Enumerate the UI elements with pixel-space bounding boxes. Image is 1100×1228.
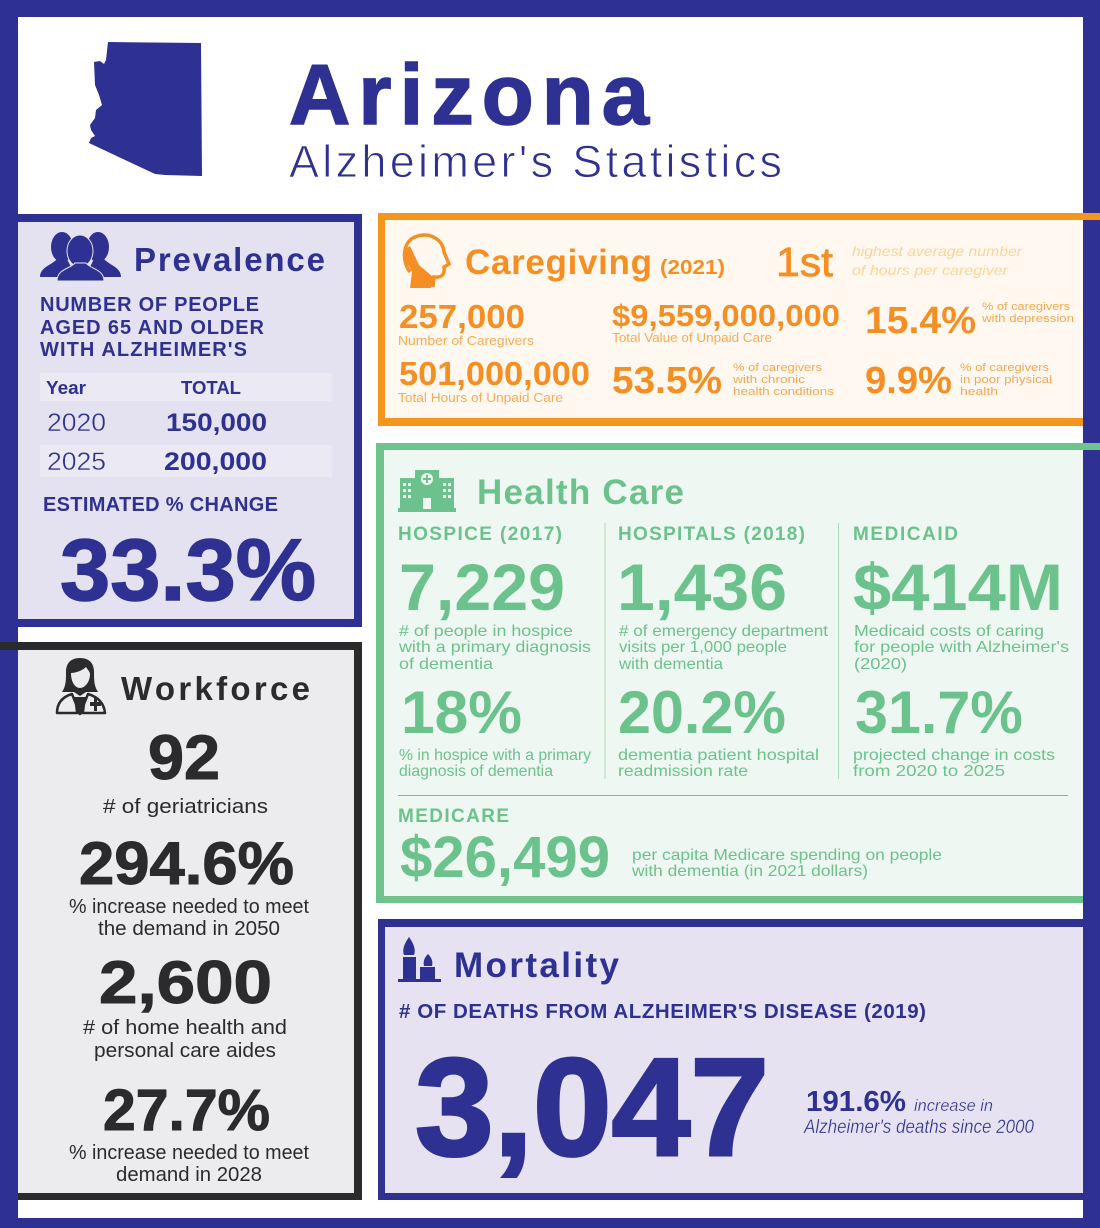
stat: 294.6%: 294.6% (79, 830, 294, 897)
heading: health care: Health Care (477, 473, 684, 512)
block: medicare: with dementia (in 2021 dollars) (631, 863, 868, 880)
column: medicaid: from 2020 to 2025 (853, 763, 1005, 780)
icon: candles (398, 937, 441, 982)
stat: 2,600 aides: personal care aides (94, 1040, 276, 1062)
panel: health care (376, 443, 1100, 903)
stat: 294.6%: the demand in 2050 (98, 918, 280, 940)
column: hospice: 7,229 (399, 550, 565, 624)
stat: depression (865, 300, 1074, 342)
panel: mortality (378, 919, 1083, 1200)
stat: 27.7%: % increase needed to meet (69, 1142, 309, 1164)
stat: 294.6% (69, 830, 309, 940)
column: hospice: HOSPICE (2017) (398, 524, 562, 545)
stat: 1st: 1st (776, 239, 834, 285)
subheading: deaths: # OF DEATHS FROM ALZHEIMER'S DISEASE (2019) (399, 1000, 926, 1023)
stat: 191.6% increase: 191.6% (806, 1086, 906, 1118)
stat: 33.3%: 33.3% (60, 522, 316, 619)
table: prevalence by year: TOTAL (181, 378, 241, 398)
caption: highest average hours (852, 243, 1023, 278)
block: medicare (398, 806, 942, 890)
column: hospice: % in hospice with a primary (399, 747, 591, 764)
stat: 191.6% increase: Alzheimer's deaths since 2000 (803, 1117, 1034, 1138)
icon: Arizona state map (89, 42, 202, 176)
column: hospitals: HOSPITALS (2018) (618, 524, 805, 545)
subheading: number of people: AGED 65 AND OLDER (40, 317, 265, 339)
stat: value of unpaid care: Total Value of Unpaid Care (612, 331, 772, 345)
stat: 2,600 aides: # of home health and (83, 1017, 287, 1039)
stat: hours of unpaid care: 501,000,000 (399, 355, 590, 392)
column: medicaid (853, 524, 1069, 780)
heading: workforce: Workforce (121, 670, 310, 707)
caption: highest average hours: highest average number (852, 243, 1023, 259)
icon: group of people (40, 232, 121, 281)
column: medicaid: (2020) (854, 656, 907, 673)
caption: highest average hours: of hours per caregiver (852, 262, 1010, 278)
stat: chronic conditions (612, 360, 835, 402)
stat: 2,600 aides (83, 949, 287, 1062)
table: prevalence by year: Year (46, 378, 86, 398)
column: medicaid: $414M (853, 550, 1063, 624)
column: hospitals: 20.2% (618, 679, 786, 746)
column: hospitals: visits per 1,000 people (619, 639, 787, 656)
column: medicaid: MEDICAID (853, 524, 958, 545)
stat: 27.7%: demand in 2028 (116, 1164, 262, 1186)
table: prevalence by year: 200,000 (164, 448, 267, 476)
stat: 92 geriatricians (103, 723, 268, 818)
stat: 27.7% (69, 1078, 309, 1186)
column: hospice: diagnosis of dementia (399, 763, 553, 780)
stat: poor physical health: 9.9% (865, 360, 952, 402)
block: medicare: per capita Medicare spending on people (632, 847, 942, 864)
stat: poor physical health: health (960, 386, 998, 398)
stat: depression: % of caregivers (982, 301, 1071, 313)
column: hospitals (617, 524, 829, 780)
stat: value of unpaid care: $9,559,000,000 (612, 298, 840, 333)
panel: prevalence (0, 214, 362, 627)
column: hospice: with a primary diagnosis (398, 639, 591, 656)
column: hospice: # of people in hospice (399, 623, 573, 640)
stat: chronic conditions: % of caregivers (733, 362, 823, 374)
column: hospice (398, 524, 591, 780)
icon: head in hand (405, 235, 449, 288)
column: hospitals: with dementia (618, 656, 723, 673)
heading: prevalence: Prevalence (134, 241, 325, 278)
title: Arizona (289, 48, 650, 143)
stat: 92 geriatricians: 92 (148, 723, 220, 793)
table: prevalence by year (40, 373, 332, 477)
column: hospitals: # of emergency department (619, 623, 829, 640)
stat: chronic conditions: health conditions (733, 386, 835, 398)
stat: 27.7%: 27.7% (103, 1078, 270, 1143)
block: medicare: MEDICARE (398, 806, 509, 827)
stat: 191.6% increase: increase in (914, 1096, 993, 1115)
subheading: number of people: WITH ALZHEIMER'S (40, 339, 247, 361)
column: hospitals: dementia patient hospital (618, 747, 819, 764)
stat: 92 geriatricians: # of geriatricians (103, 796, 268, 818)
column: hospitals: readmission rate (618, 763, 748, 780)
stat: number of caregivers: 257,000 (399, 298, 525, 335)
heading: mortality: Mortality (454, 946, 620, 985)
title: Alzheimer's Statistics (289, 136, 782, 187)
stat: poor physical health: in poor physical (960, 374, 1052, 386)
stat: 2,600 aides: 2,600 (99, 949, 272, 1016)
table: prevalence by year: 2020 (47, 409, 106, 437)
stat: 3,047: 3,047 (415, 1030, 769, 1185)
stat: 191.6% increase (803, 1086, 1034, 1138)
column: medicaid: for people with Alzheimer's (854, 639, 1069, 656)
subheading: number of people: NUMBER OF PEOPLE (40, 294, 259, 316)
column: medicaid: 31.7% (855, 679, 1023, 746)
heading: caregiving: Caregiving (465, 243, 652, 282)
stat: number of caregivers (398, 298, 534, 348)
icon: doctor (57, 658, 105, 714)
column: medicaid: Medicaid costs of caring (854, 623, 1044, 640)
subheading: number of people (40, 294, 265, 361)
stat: chronic conditions: 53.5% (612, 360, 722, 402)
table: prevalence by year: 150,000 (166, 409, 267, 437)
heading: caregiving: (2021) (660, 257, 725, 279)
column: hospice: of dementia (399, 656, 493, 673)
title (289, 48, 782, 187)
stat: 294.6%: % increase needed to meet (69, 896, 309, 918)
stat: depression: with depression (981, 313, 1074, 325)
column: hospitals: 1,436 (617, 550, 787, 624)
column: hospice: 18% (401, 679, 522, 746)
stat: chronic conditions: with chronic (732, 374, 806, 386)
stat: hours of unpaid care: Total Hours of Unpaid Care (398, 391, 563, 405)
panel: caregiving (378, 213, 1100, 426)
label: estimated change: ESTIMATED % CHANGE (43, 494, 278, 516)
table: prevalence by year: 2025 (47, 448, 106, 476)
stat: poor physical health (865, 360, 1052, 402)
icon: hospital (398, 470, 456, 512)
stat: depression: 15.4% (865, 300, 976, 342)
stat: poor physical health: % of caregivers (960, 362, 1050, 374)
panel: workforce (0, 642, 362, 1200)
column: medicaid: projected change in costs (853, 747, 1055, 764)
block: medicare: $26,499 (400, 825, 610, 890)
stat: number of caregivers: Number of Caregivers (398, 334, 534, 348)
